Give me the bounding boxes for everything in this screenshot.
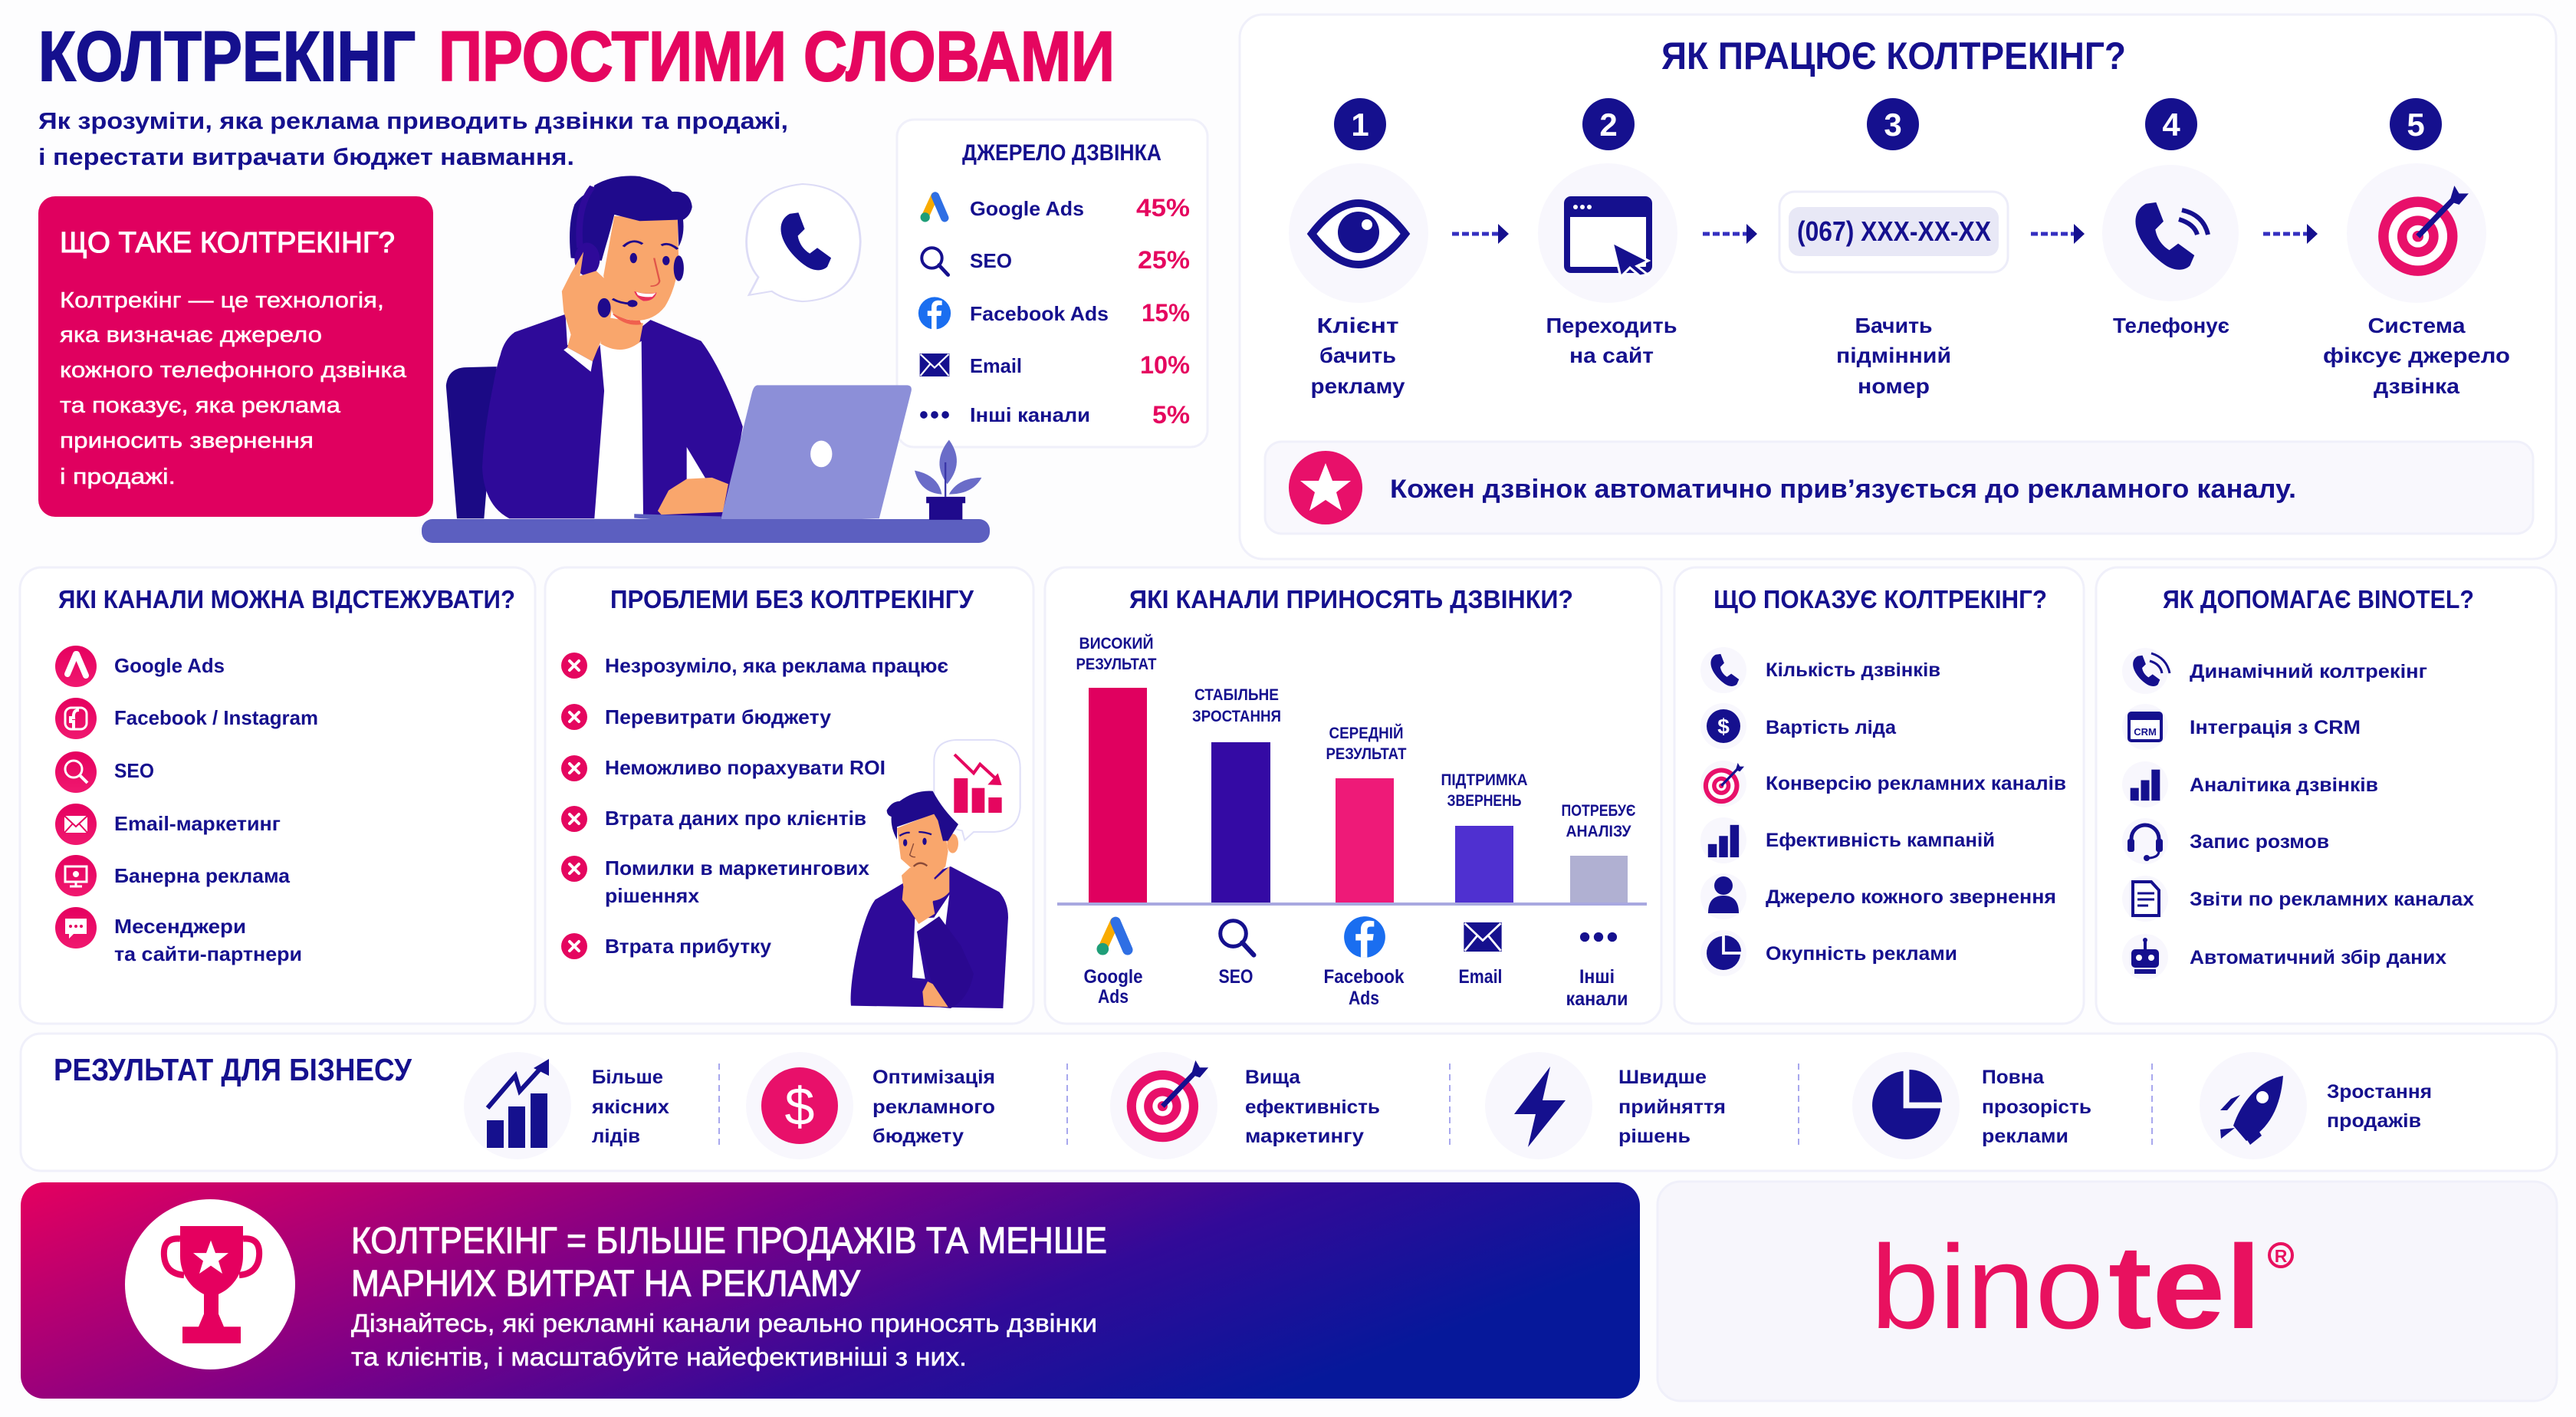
item: SEO: SEO — [114, 759, 154, 782]
hair — [887, 791, 958, 841]
item: lead cost: Вартість ліда — [1766, 717, 1897, 738]
illustration: worried man — [851, 740, 1020, 1008]
chart channel icons — [1084, 916, 1628, 1010]
laptop — [721, 385, 912, 524]
result: sales growth — [2200, 1052, 2432, 1159]
chair — [446, 367, 497, 518]
item: source of each request — [1700, 873, 2056, 919]
chart channel icons: канали — [1566, 988, 1628, 1010]
logo — [1871, 1221, 2292, 1353]
icon: target — [2378, 186, 2469, 276]
item: Facebook / Instagram — [55, 698, 318, 739]
step 3: номер — [1858, 374, 1930, 398]
result: faster decisions — [1485, 1052, 1726, 1159]
hair — [570, 176, 692, 261]
subtitle — [38, 107, 788, 170]
headset — [580, 186, 593, 248]
panel: how Binotel helps — [2096, 567, 2556, 1024]
item: call recording: Запис розмов — [2190, 831, 2329, 853]
result: faster decisions: Швидше — [1618, 1067, 1707, 1088]
item: campaign efficiency: Ефективність кампаній — [1766, 830, 1995, 851]
typing hand — [658, 478, 728, 515]
step 2: 2 — [1599, 107, 1618, 143]
hand with headset — [562, 252, 613, 361]
title: КОЛТРЕКІНГ — [38, 18, 416, 96]
chart channel icons: SEO — [1219, 966, 1253, 988]
step 5: фіксує джерело — [2323, 344, 2510, 367]
icon: phone speech bubble — [747, 184, 860, 301]
row: Email: Email — [970, 354, 1022, 377]
neck — [600, 317, 643, 350]
logo: bino — [1871, 1221, 2104, 1353]
arrow 1 — [1452, 224, 1509, 244]
text block: definition: Колтрекінг — це технологія, — [60, 288, 384, 313]
row: other channels: 5% — [1152, 401, 1190, 429]
item: messengers — [55, 907, 302, 965]
item: CRM integration — [2122, 704, 2361, 750]
bar chart: СЕРЕДНІЙ — [1329, 724, 1403, 742]
step 4: Телефонує — [2113, 314, 2229, 337]
heading: how Binotel helps: ЯК ДОПОМАГАЄ BINOTEL? — [2163, 585, 2474, 613]
row: Google Ads — [921, 194, 1190, 222]
banner text: Дізнайтесь, які рекламні канали реально приносять дзвінки — [351, 1309, 1097, 1337]
icon: ringing phone — [2135, 202, 2208, 270]
row: Facebook Ads: 15% — [1142, 299, 1190, 327]
step 4 — [2102, 98, 2239, 337]
result: marketing efficiency — [1110, 1052, 1380, 1159]
item: banner ads — [55, 855, 291, 896]
substitute number — [1779, 192, 2008, 272]
heading: business result: РЕЗУЛЬТАТ ДЛЯ БІЗНЕСУ — [54, 1052, 412, 1087]
bar chart: ЗРОСТАННЯ — [1192, 708, 1281, 725]
banner heading: МАРНИХ ВИТРАТ НА РЕКЛАМУ — [351, 1264, 860, 1304]
panel: business result — [21, 1034, 2557, 1171]
item: banner ads: Банерна реклама — [114, 864, 291, 887]
desk — [422, 519, 990, 543]
row: other channels: Інші канали — [970, 403, 1090, 426]
icon: eye — [1312, 203, 1405, 265]
heading: trackable channels: ЯКІ КАНАЛИ МОЖНА ВІДСТЕЖУВАТИ? — [58, 585, 515, 613]
bar chart: ПІДТРИМКА — [1441, 771, 1527, 789]
result: budget optimization — [746, 1052, 995, 1159]
row: SEO: 25% — [1138, 246, 1190, 274]
result: budget optimization: рекламного — [872, 1096, 995, 1118]
bar chart: РЕЗУЛЬТАТ — [1326, 745, 1407, 763]
item: Email marketing — [55, 804, 281, 845]
chart channel icons: Google — [1084, 966, 1143, 988]
result: more quality leads: якісних — [591, 1096, 669, 1118]
banner heading: КОЛТРЕКІНГ = БІЛЬШЕ ПРОДАЖІВ ТА МЕНШЕ — [351, 1221, 1107, 1261]
subtitle: і перестати витрачати бюджет навмання. — [38, 143, 574, 170]
chart channel icons: Ads — [1098, 986, 1129, 1008]
step 5: дзвінка — [2374, 374, 2459, 398]
item: messengers: та сайти-партнери — [114, 942, 302, 965]
item: reports — [2122, 876, 2474, 922]
item: call recording — [2122, 818, 2329, 864]
step 1: рекламу — [1311, 374, 1405, 398]
result: more quality leads — [464, 1052, 669, 1159]
row: Google Ads: Google Ads — [970, 197, 1084, 220]
result: marketing efficiency: Вища — [1245, 1067, 1301, 1088]
item: campaign efficiency — [1700, 817, 1995, 863]
shirt — [912, 895, 949, 979]
chart channel icons: Facebook — [1323, 966, 1405, 988]
result: full transparency: реклами — [1982, 1126, 2068, 1147]
step 2: на сайт — [1569, 344, 1654, 367]
row: other channels — [920, 401, 1190, 429]
item: Google Ads: Google Ads — [114, 654, 225, 677]
heading: what it shows: ЩО ПОКАЗУЄ КОЛТРЕКІНГ? — [1714, 585, 2047, 613]
item: Google Ads — [55, 646, 225, 687]
arrow 4 — [2263, 224, 2318, 244]
arrow 2 — [1703, 224, 1757, 244]
result: more quality leads: Більше — [592, 1067, 663, 1088]
row: Facebook Ads: Facebook Ads — [970, 302, 1109, 325]
problem list: Неможливо порахувати ROI — [605, 756, 886, 779]
panel: trackable channels — [20, 567, 535, 1024]
banner heading — [351, 1221, 1107, 1304]
row: Facebook Ads — [918, 297, 1190, 330]
item: data collection: Автоматичний збір даних — [2190, 947, 2446, 968]
heading: call source: ДЖЕРЕЛО ДЗВІНКА — [962, 140, 1162, 166]
callout: every call is linked: Кожен дзвінок автоматично прив’язується до рекламного каналу. — [1390, 475, 2296, 504]
item: reports: Звіти по рекламних каналах — [2190, 889, 2474, 910]
icon: trophy — [125, 1199, 295, 1369]
text block: definition: яка визначає джерело — [60, 323, 322, 347]
item: CRM integration: CRM — [2134, 726, 2157, 738]
step 5: Система — [2367, 314, 2466, 337]
panel: how call tracking works — [1240, 15, 2556, 559]
title — [38, 18, 1115, 96]
row: Email — [920, 351, 1190, 379]
item: data collection — [2122, 934, 2446, 980]
item: messengers: Месенджери — [114, 915, 246, 938]
problem list: Незрозуміло, яка реклама працює — [605, 654, 948, 677]
panel: what is call tracking — [38, 196, 433, 517]
speech bubble with falling chart — [934, 740, 1020, 840]
sleeve — [917, 916, 974, 1008]
result: faster decisions: рішень — [1618, 1126, 1691, 1147]
text block: definition: і продажі. — [60, 465, 176, 489]
title: ПРОСТИМИ СЛОВАМИ — [439, 18, 1115, 96]
step 1: бачить — [1319, 344, 1396, 367]
face details — [630, 253, 637, 263]
chart channel icons: Email — [1458, 966, 1503, 988]
bar chart: РЕЗУЛЬТАТ — [1076, 656, 1157, 673]
step 2: Переходить — [1546, 314, 1677, 337]
panel: binotel logo — [1658, 1182, 2557, 1401]
item: ad payback: Окупність реклами — [1766, 943, 1957, 965]
result: sales growth: Зростання — [2327, 1081, 2432, 1103]
neck — [933, 866, 949, 901]
row: SEO — [922, 246, 1190, 275]
step 3: 3 — [1884, 107, 1902, 143]
problem list: рішеннях — [605, 884, 700, 907]
item: channel conversion: Конверсію рекламних каналів — [1766, 773, 2066, 794]
item: call analytics: Аналітика дзвінків — [2190, 774, 2378, 796]
panel: which channels bring calls — [1045, 567, 1661, 1024]
jacket — [482, 314, 743, 518]
bar chart: ПОТРЕБУЄ — [1561, 802, 1636, 820]
problem list: Втрата прибутку — [605, 935, 772, 958]
substitute number: (067) XXX-XX-XX — [1797, 215, 1991, 247]
jacket — [851, 866, 1008, 1008]
shirt — [594, 341, 707, 518]
heading: how it works: ЯК ПРАЦЮЄ КОЛТРЕКІНГ? — [1661, 35, 2126, 77]
text block: definition: кожного телефонного дзвінка — [60, 358, 407, 383]
item: number of calls — [1700, 647, 1940, 693]
item: lead cost — [1700, 703, 1897, 749]
result: budget optimization: $ — [785, 1077, 814, 1136]
step 5 — [2323, 98, 2510, 398]
text block: definition — [60, 288, 407, 489]
result: more quality leads: лідів — [592, 1126, 640, 1147]
row: SEO: SEO — [970, 249, 1012, 272]
step 3: підмінний — [1836, 344, 1951, 367]
logo: tel — [2108, 1221, 2262, 1353]
step 2 — [1538, 98, 1677, 367]
logo: R — [2275, 1246, 2288, 1266]
text block: definition: та показує, яка реклама — [60, 393, 341, 418]
item: dynamic call tracking: Динамічний колтрекінг — [2190, 661, 2427, 682]
heading: what is call tracking: ЩО ТАКЕ КОЛТРЕКІНГ? — [60, 227, 395, 259]
subtitle: Як зрозуміти, яка реклама приводить дзвінки та продажі, — [38, 107, 788, 134]
result: faster decisions: прийняття — [1618, 1096, 1726, 1118]
item: channel conversion — [1700, 761, 2066, 807]
face — [603, 216, 678, 321]
step 3 — [1779, 98, 2008, 398]
bar chart — [1057, 634, 1647, 906]
row: Google Ads: 45% — [1136, 194, 1190, 222]
result: sales growth: продажів — [2327, 1110, 2421, 1132]
step 3: Бачить — [1855, 314, 1932, 337]
problem list: Перевитрати бюджету — [605, 705, 832, 728]
face — [897, 813, 948, 879]
result: marketing efficiency: ефективність — [1245, 1096, 1380, 1118]
problem list — [561, 653, 948, 959]
step 5: 5 — [2407, 107, 2425, 143]
callout: every call is linked — [1265, 442, 2533, 534]
item: CRM integration: Інтеграція з CRM — [2190, 717, 2361, 738]
problem list: Помилки в маркетингових — [605, 856, 870, 879]
banner text — [351, 1309, 1097, 1371]
result: full transparency — [1852, 1052, 2091, 1159]
item: SEO — [55, 751, 154, 793]
chart channel icons: Ads — [1349, 988, 1379, 1009]
hand at chin — [902, 868, 937, 924]
item: source of each request: Джерело кожного звернення — [1766, 886, 2056, 908]
text block: definition: приносить звернення — [60, 429, 314, 453]
plant — [915, 440, 981, 520]
step 4: 4 — [2162, 107, 2180, 143]
icon: browser and cursor — [1567, 198, 1649, 277]
step 1: Клієнт — [1317, 314, 1398, 337]
banner: call tracking equals more sales — [21, 1182, 1640, 1399]
right ear side — [674, 255, 684, 281]
chart channel icons: Інші — [1579, 966, 1615, 988]
panel: what call tracking shows — [1674, 567, 2084, 1024]
illustration: operator with laptop — [446, 176, 912, 524]
result: marketing efficiency: маркетингу — [1245, 1126, 1364, 1147]
banner text: та клієнтів, і масштабуйте найефективніші з них. — [351, 1343, 967, 1371]
bar chart: АНАЛІЗУ — [1566, 823, 1631, 840]
row: Email: 10% — [1140, 351, 1190, 379]
panel: call source card — [897, 120, 1208, 447]
item: Facebook / Instagram: Facebook / Instagram — [114, 706, 318, 729]
heading: which channels: ЯКІ КАНАЛИ ПРИНОСЯТЬ ДЗВІНКИ? — [1129, 585, 1573, 613]
step 1 — [1289, 98, 1428, 398]
item: Email marketing: Email-маркетинг — [114, 812, 281, 835]
item: ad payback — [1700, 930, 1957, 976]
item: lead cost: $ — [1717, 715, 1730, 738]
problem list: Втрата даних про клієнтів — [605, 807, 866, 830]
bar chart: ВИСОКИЙ — [1079, 634, 1153, 653]
bar chart: СТАБІЛЬНЕ — [1194, 686, 1279, 704]
bar chart: ЗВЕРНЕНЬ — [1447, 792, 1521, 810]
item: number of calls: Кількість дзвінків — [1766, 659, 1940, 681]
heading: problems: ПРОБЛЕМИ БЕЗ КОЛТРЕКІНГУ — [610, 585, 974, 613]
item: call analytics — [2122, 761, 2378, 807]
result: budget optimization: бюджету — [872, 1126, 964, 1147]
result: full transparency: прозорість — [1982, 1096, 2091, 1118]
dividers — [719, 1064, 2152, 1148]
result: budget optimization: Оптимізація — [872, 1067, 995, 1088]
result: full transparency: Повна — [1982, 1067, 2045, 1088]
arrow 3 — [2031, 224, 2085, 244]
step 1: 1 — [1351, 107, 1369, 143]
item: dynamic call tracking — [2122, 648, 2427, 694]
panel: problems without call tracking — [545, 567, 1033, 1024]
